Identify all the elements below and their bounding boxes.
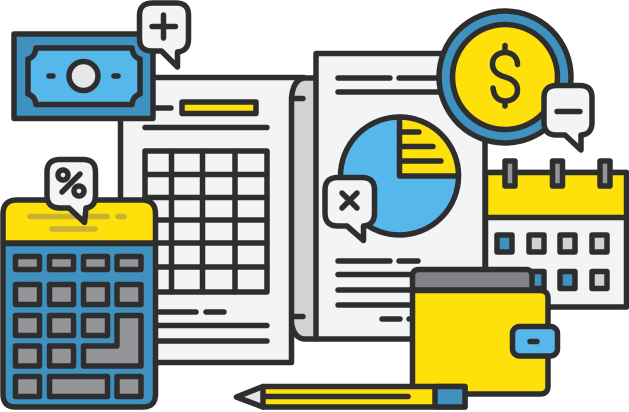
panel: calendar bbox=[486, 161, 626, 307]
panel: calculator bbox=[3, 200, 156, 407]
icon: pencil bbox=[236, 386, 465, 407]
icon: coin bbox=[439, 11, 571, 143]
icon: multiply speech bubble bbox=[325, 178, 374, 240]
calendar rings bbox=[505, 161, 610, 186]
panel: left spreadsheet document bbox=[120, 78, 304, 362]
pie chart bbox=[340, 117, 458, 235]
icon: wallet bbox=[412, 270, 558, 394]
calendar header bbox=[486, 172, 626, 218]
icon: dollar sign bbox=[492, 46, 518, 106]
footer text lines bbox=[145, 312, 267, 341]
scroll roll of left document bbox=[291, 78, 318, 339]
bottom text lines bbox=[338, 261, 418, 319]
calculator display marks bbox=[30, 216, 124, 229]
icon: minus speech bubble bbox=[544, 86, 592, 150]
icon: percent speech bubble bbox=[47, 160, 96, 222]
icon: banknote bbox=[14, 34, 153, 118]
icon: plus speech bubble bbox=[140, 3, 188, 67]
wallet clasp bbox=[512, 326, 558, 356]
header dash bbox=[150, 105, 171, 111]
yellow title box bbox=[182, 102, 256, 114]
top text lines bbox=[338, 78, 445, 92]
table grid bbox=[145, 151, 267, 292]
calendar day cells bbox=[497, 235, 607, 288]
header rule bbox=[145, 125, 267, 130]
calculator keys bbox=[16, 256, 141, 396]
panel: right pie chart document bbox=[316, 54, 485, 339]
